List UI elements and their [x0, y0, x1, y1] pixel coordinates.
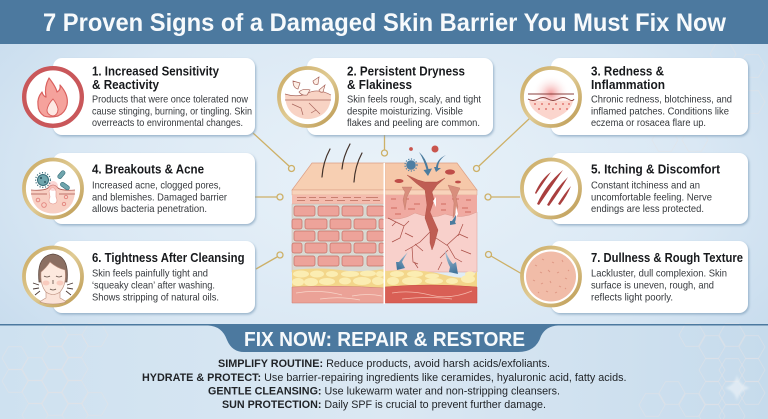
text block: Products that were once tolerated now: [92, 94, 248, 106]
divider and banner tab: [0, 324, 768, 352]
text block: ‘squeaky clean’ after washing.: [92, 280, 215, 292]
text block: cause stinging, burning, or tingling. Skin: [92, 106, 252, 118]
icon: face with tight skin: [24, 248, 82, 306]
heading: 6. Tightness After Cleansing: [92, 251, 244, 265]
heading: & Flakiness: [347, 78, 412, 92]
central skin cross-section diagram: [292, 144, 477, 304]
text block: uncomfortable feeling. Nerve: [591, 192, 712, 204]
skin cracks: [388, 175, 471, 270]
icon: rough skin texture: [522, 248, 580, 306]
heading: 5. Itching & Discomfort: [591, 162, 721, 176]
icon: inflamed skin: [522, 68, 580, 126]
heading: Inflammation: [591, 78, 665, 92]
blue irritants and arrows: [394, 146, 461, 274]
title banner: [0, 0, 768, 44]
text block: despite moisturizing. Visible: [347, 106, 463, 118]
text block: Chronic redness, blotchiness, and: [591, 94, 732, 106]
panel: fix now section: [0, 324, 768, 419]
text block: Shows stripping of natural oils.: [92, 292, 219, 304]
text block: simplify routine: SIMPLIFY ROUTINE: Reduce products, avoid harsh acids/exfoliants.: [218, 358, 550, 370]
heading: 2. Persistent Dryness: [347, 64, 465, 78]
heading: fix now: FIX NOW: REPAIR & RESTORE: [244, 329, 525, 351]
text block: eczema or rosacea flare up.: [591, 118, 706, 129]
icon: flaking skin: [279, 68, 337, 126]
panel: card 2 dryness: [279, 58, 493, 135]
panel: card 6 tightness: [24, 241, 255, 313]
panel: card 1 sensitivity: [24, 58, 255, 135]
heading: 3. Redness &: [591, 64, 664, 78]
text block: sun protection: SUN PROTECTION: Daily SPF is crucial to prevent further damage.: [222, 399, 546, 411]
text block: gentle cleansing: GENTLE CLEANSING: Use lukewarm water and non-stripping cleansers.: [208, 386, 560, 398]
text block: surface is uneven, rough, and: [591, 280, 714, 292]
text block: reflects light poorly.: [591, 292, 673, 304]
heading: 7. Dullness & Rough Texture: [591, 251, 743, 265]
hairs: [322, 144, 362, 182]
text block: overreacts to environmental changes.: [92, 118, 243, 129]
icon: sparkle: [725, 375, 750, 401]
text block: inflamed patches. Conditions like: [591, 106, 729, 118]
text block: Lackluster, dull complexion. Skin: [591, 268, 727, 280]
text block: hydrate and protect: HYDRATE & PROTECT: Use barrier-repairing ingredients like ceramides, hyaluronic acid, fatty acids.: [142, 372, 626, 384]
hexagon pattern: top right: [652, 43, 765, 151]
panel: card 5 itching: [522, 153, 748, 224]
text block: allows bacteria penetration.: [92, 204, 207, 215]
text block: Skin feels painfully tight and: [92, 268, 208, 280]
text block: Skin feels rough, scaly, and tight: [347, 94, 481, 106]
text block: endings are less protected.: [591, 204, 704, 215]
icon: flame: [24, 68, 82, 126]
connector lines: [253, 118, 530, 274]
icon: scratch marks: [522, 160, 580, 218]
hexagon pattern: bottom left: [2, 324, 108, 419]
icon: acne pore and bacteria: [24, 160, 82, 218]
damaged skin side: [385, 163, 477, 303]
title: 7 Proven Signs of a Damaged Skin Barrier You Must Fix Now: [43, 10, 727, 37]
healthy skin side: [292, 163, 384, 303]
heading: 1. Increased Sensitivity: [92, 64, 219, 78]
heading: 4. Breakouts & Acne: [92, 162, 204, 176]
center divider: [384, 163, 385, 304]
text block: flakes and peeling are common.: [347, 118, 480, 129]
panel: card 4 breakouts: [24, 153, 255, 224]
text block: Increased acne, clogged pores,: [92, 180, 221, 192]
text block: Constant itchiness and an: [591, 180, 700, 192]
panel: card 3 redness: [522, 58, 748, 135]
text block: and blemishes. Damaged barrier: [92, 192, 228, 204]
panel: card 7 dullness: [522, 241, 748, 313]
hexagon pattern: bottom right: [639, 324, 765, 419]
heading: & Reactivity: [92, 78, 159, 92]
